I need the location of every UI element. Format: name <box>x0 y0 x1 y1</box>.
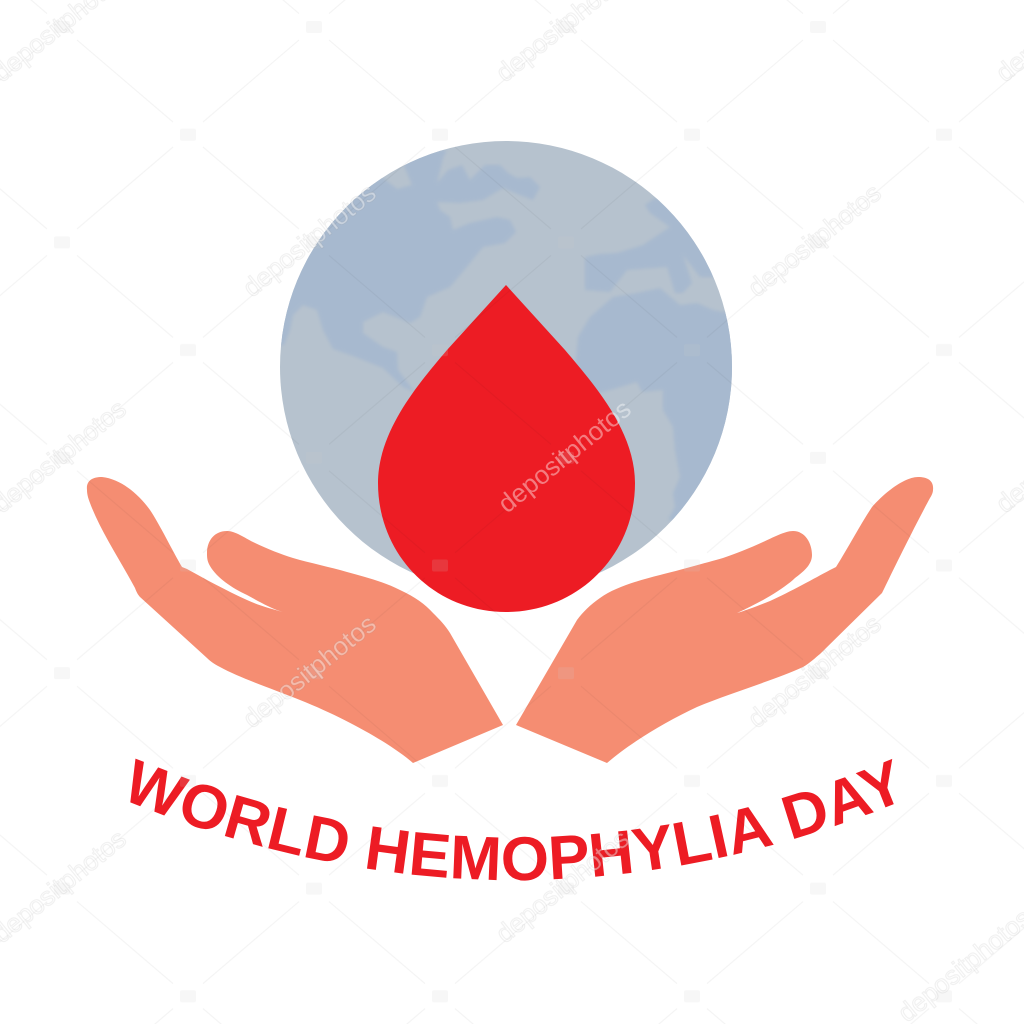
watermarks: depositphotos <box>742 608 887 734</box>
watermarks: depositphotos <box>237 177 382 303</box>
icon: globe <box>280 141 732 574</box>
icon: right hand <box>516 477 933 763</box>
watermarks: depositphotos <box>742 177 887 303</box>
watermarks: depositphotos <box>490 823 635 949</box>
title: curved text: WORLD HEMOPHYLIA DAY <box>130 758 894 881</box>
watermarks: depositphotos <box>492 393 637 519</box>
icon: left hand <box>87 477 503 763</box>
icon: blood drop <box>378 285 635 612</box>
oceans on the globe <box>281 150 732 520</box>
watermarks: depositphotos <box>237 608 382 734</box>
